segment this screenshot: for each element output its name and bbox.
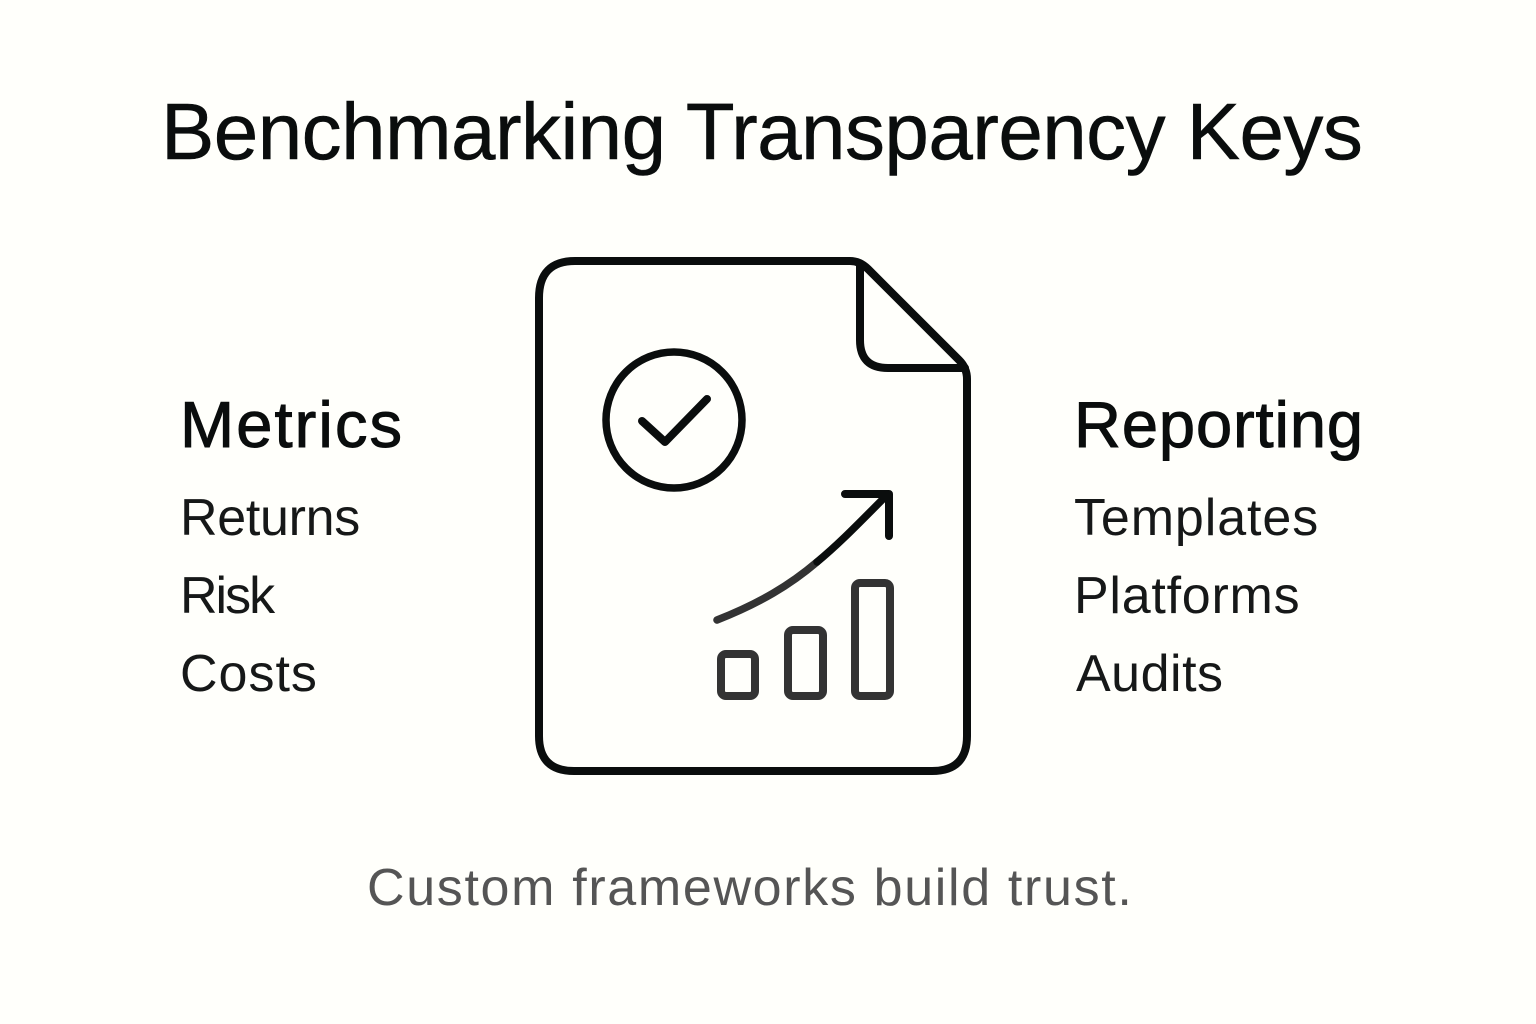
icon: growth arrow bbox=[717, 494, 889, 620]
document outline bbox=[539, 261, 967, 771]
metrics item: returns: Returns bbox=[180, 489, 360, 547]
icon: check circle bbox=[606, 352, 742, 488]
icon: document with check and growth chart bbox=[535, 257, 971, 775]
heading: reporting: Reporting bbox=[1074, 388, 1364, 461]
panel: metrics bbox=[180, 388, 404, 703]
title: Benchmarking Transparency Keys bbox=[161, 87, 1362, 176]
bar chart bbox=[721, 583, 890, 696]
reporting item: templates: Templates bbox=[1074, 489, 1319, 547]
reporting item: audits: Audits bbox=[1076, 645, 1224, 703]
heading: metrics: Metrics bbox=[180, 388, 404, 461]
metrics item: costs: Costs bbox=[180, 645, 318, 703]
footer text: Custom frameworks build trust. bbox=[367, 859, 1133, 917]
panel: reporting bbox=[1074, 388, 1364, 703]
reporting item: platforms: Platforms bbox=[1074, 567, 1300, 625]
metrics item: risk: Risk bbox=[180, 567, 273, 625]
document folded corner bbox=[860, 264, 965, 368]
